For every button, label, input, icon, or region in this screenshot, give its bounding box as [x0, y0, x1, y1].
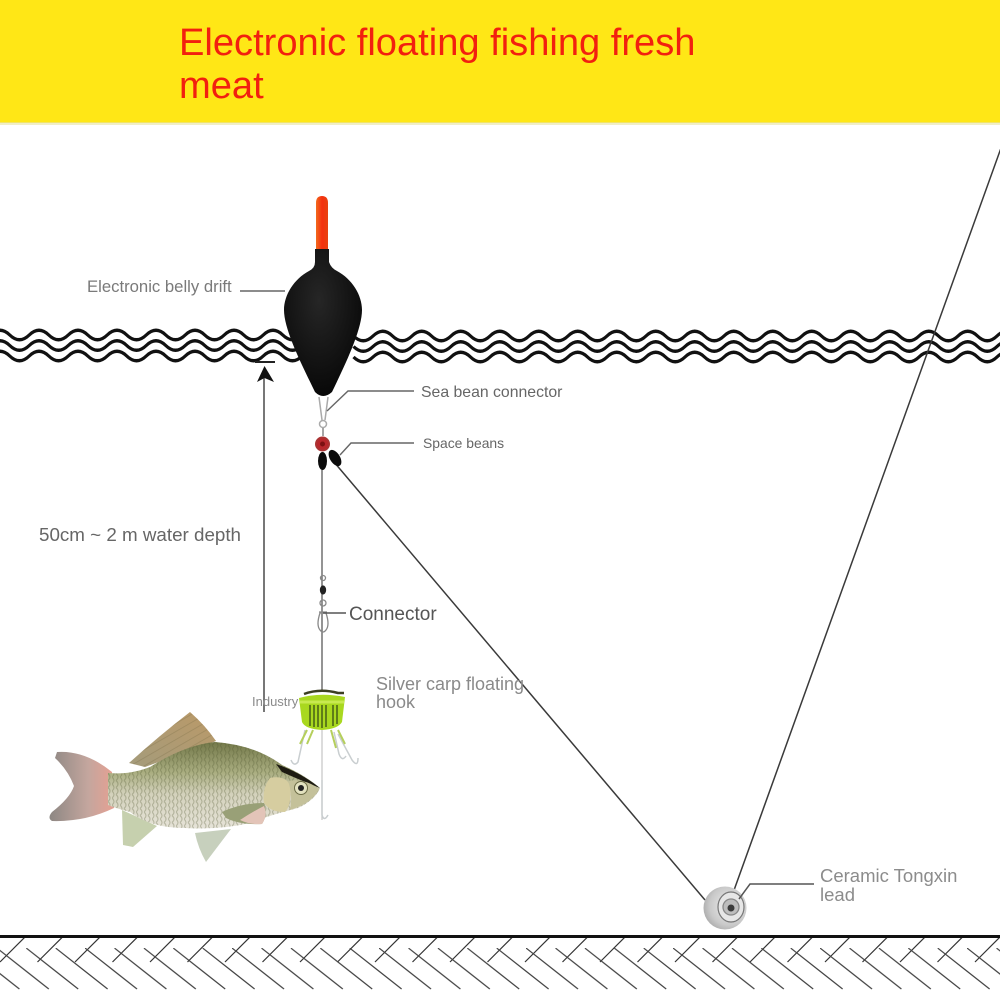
fishing line to top right [733, 148, 1000, 893]
carp fish [50, 712, 320, 862]
fish body [108, 742, 320, 828]
label: industry: Industry [252, 694, 299, 709]
depth arrow [255, 362, 275, 712]
label: electronic belly drift: Electronic belly drift [87, 277, 232, 296]
water surface waves [0, 330, 1000, 362]
label: sea bean connector: Sea bean connector [421, 384, 562, 401]
dorsal fin [129, 712, 216, 767]
swivel connector [319, 397, 328, 436]
tail fin [50, 752, 114, 821]
title: meat [179, 65, 264, 107]
anal fin [195, 829, 231, 862]
title: Electronic floating fishing fresh [179, 22, 695, 64]
label: ceramic lead: lead [820, 884, 855, 905]
antenna [316, 196, 328, 249]
label: connector: Connector [349, 604, 437, 625]
label: space beans [340, 435, 504, 455]
cage body [299, 695, 345, 730]
pelvic fin [122, 810, 157, 847]
cage top [304, 691, 344, 694]
title banner [0, 0, 1000, 125]
label: silver carp floating hook: hook [376, 692, 416, 712]
label: silver carp floating hook: Silver carp floating [376, 674, 524, 694]
lake bed ground with hatching [0, 935, 1000, 990]
gill cover [264, 777, 290, 812]
floating hook cage [291, 691, 358, 820]
hook arms [291, 730, 358, 818]
fishing line to lead [334, 462, 705, 900]
electronic float [284, 196, 362, 396]
label: sea bean connector [327, 384, 562, 411]
head back dark [276, 764, 320, 788]
main line to hook [321, 470, 323, 690]
label: ceramic lead: Ceramic Tongxin [820, 865, 957, 886]
label: space beans: Space beans [423, 435, 504, 451]
lower swivel connector [318, 576, 328, 632]
eye [294, 782, 308, 794]
float body [284, 249, 362, 396]
pectoral fin [222, 803, 266, 824]
label: ceramic lead [739, 865, 957, 905]
ceramic lead [704, 886, 746, 930]
space beans [316, 438, 344, 470]
depth label: 50cm ~ 2 m water depth [39, 524, 241, 545]
